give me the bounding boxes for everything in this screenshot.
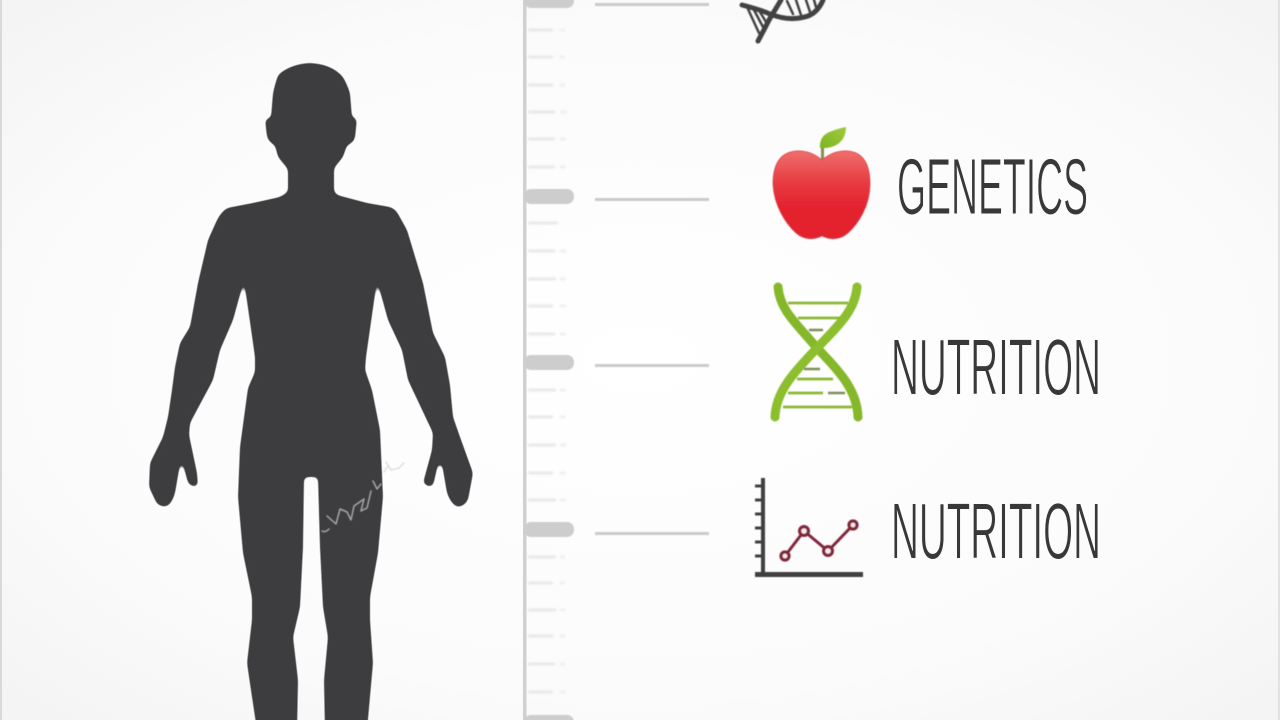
major ruler ticks	[524, 0, 574, 720]
height ruler	[523, 0, 574, 720]
ruler spine	[523, 0, 526, 720]
helix rungs	[783, 303, 852, 407]
apple leaf	[820, 127, 846, 148]
icon: grey dna helix, top	[742, 0, 823, 41]
chart points	[781, 521, 857, 560]
icon: apple	[773, 127, 870, 239]
helix strands	[778, 287, 858, 417]
right frame edge	[1278, 0, 1280, 720]
chart line	[785, 525, 853, 556]
apple body	[773, 151, 870, 239]
chart axis ticks	[755, 486, 762, 556]
apple stem	[821, 144, 824, 160]
minor ruler ticks	[528, 30, 567, 692]
icon: line chart	[755, 478, 863, 577]
connector lines	[595, 3, 709, 535]
icon: green dna helix	[775, 287, 858, 417]
chart axes	[755, 478, 863, 577]
watermark mark on thigh	[322, 462, 404, 532]
left frame edge	[0, 0, 2, 720]
human silhouette	[149, 63, 473, 720]
